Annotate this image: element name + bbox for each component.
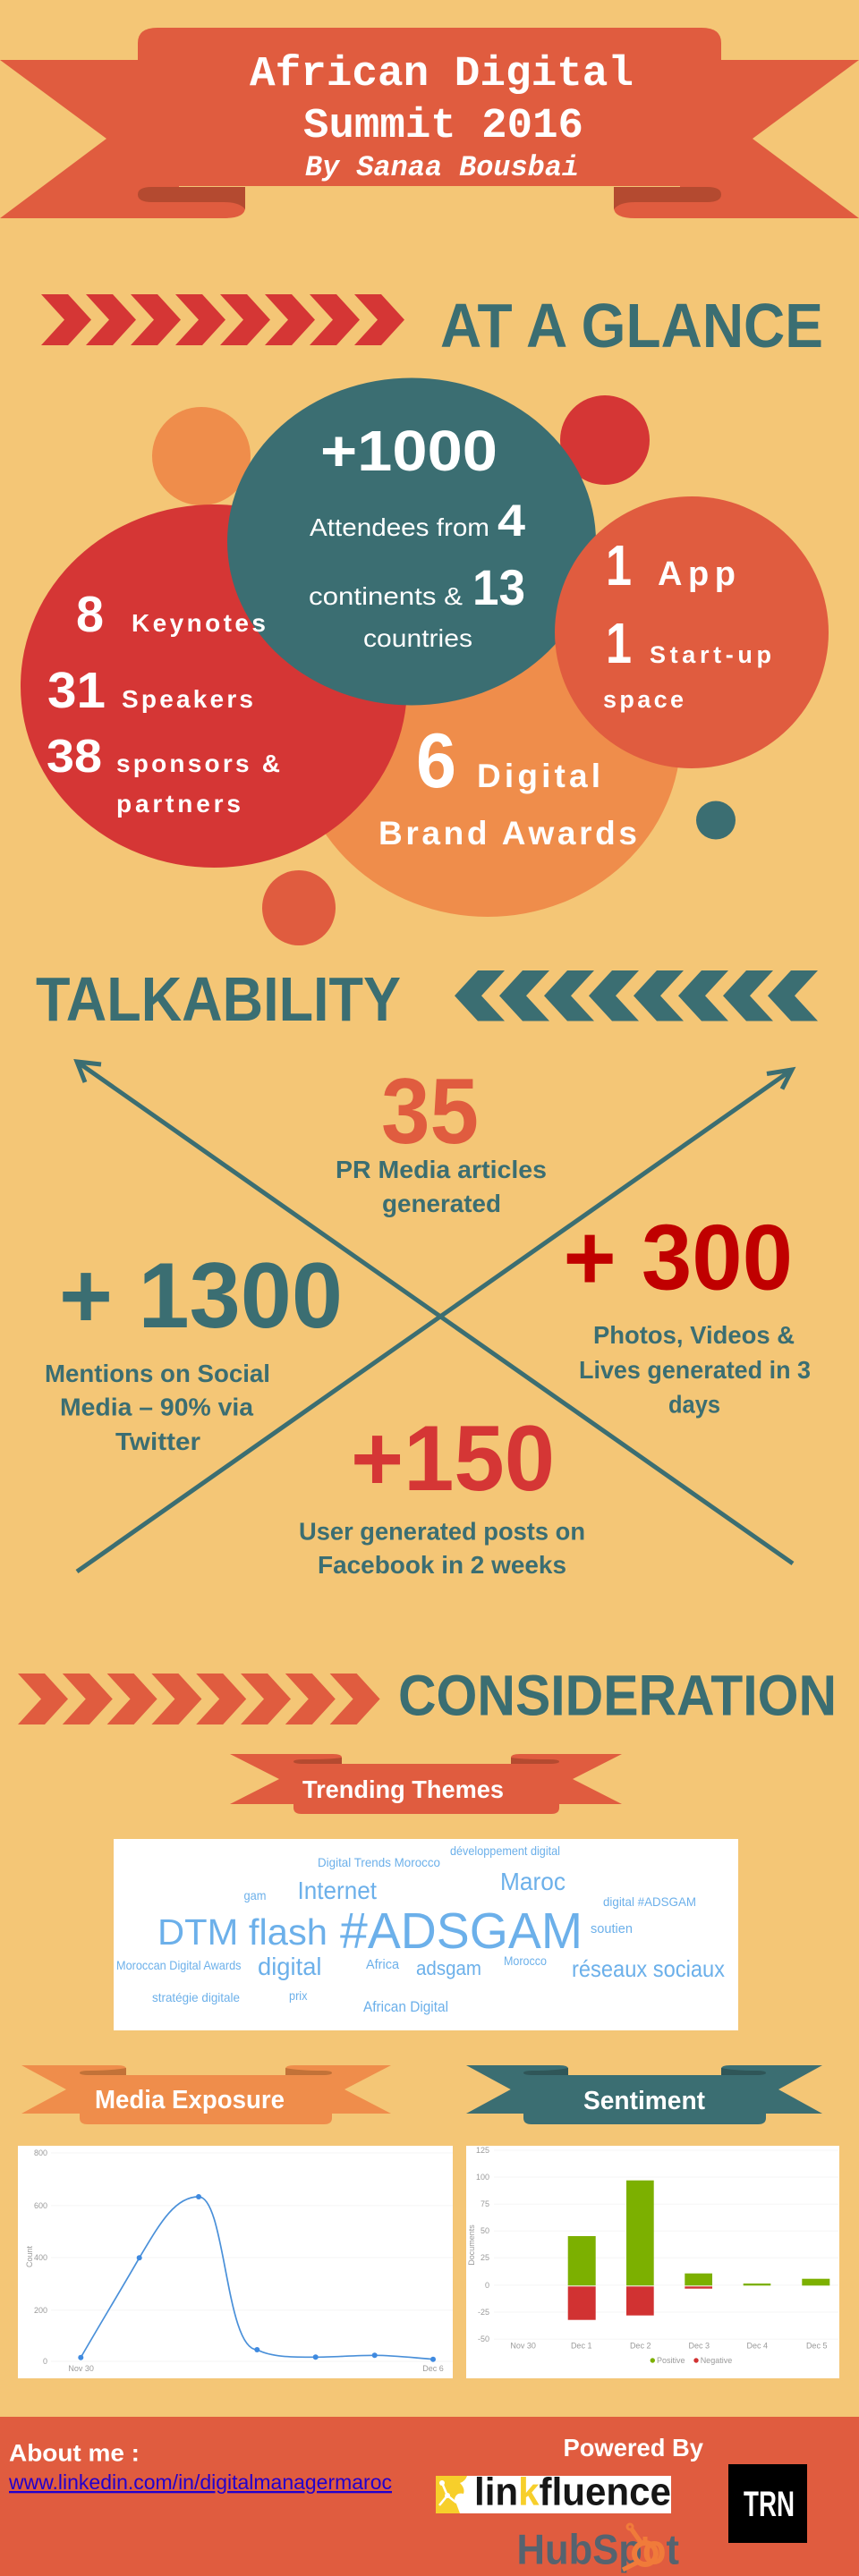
app stats: 1 [606,533,632,597]
ribbon label: trending themes: Trending Themes [302,1775,504,1803]
awards stats: Brand Awards [378,815,637,852]
word cloud terms: adsgam [416,1957,481,1979]
y axis labels [476,2146,489,2343]
x axis labels: Dec 5 [806,2341,827,2350]
y axis labels: 50 [481,2226,489,2235]
speakers stats [47,586,280,818]
word cloud terms: African Digital [363,1998,448,2015]
word cloud terms: Africa [366,1957,400,1972]
word cloud terms: digital [258,1953,322,1980]
y axis labels: 100 [476,2173,489,2182]
awards stats [378,718,637,852]
title text [250,51,634,184]
y axis title: Documents [467,2224,476,2266]
ribbon label: sentiment: Sentiment [583,2087,705,2115]
y axis labels: 400 [34,2253,47,2262]
speakers stats: 8 [76,586,104,643]
attendees stats: +1000 [320,419,498,483]
bubble: red large [21,504,407,868]
chevrons: consideration [18,1674,380,1724]
sprocket: hubspot [623,2524,656,2570]
arrow: up left [77,1062,793,1563]
y axis labels: 75 [481,2199,489,2208]
bubble cluster [21,377,829,945]
y axis labels: 0 [43,2357,47,2366]
stat: photos and videos: days [668,1391,720,1419]
ribbon: sentiment [466,2065,822,2124]
stat: PR articles [336,1060,547,1217]
about me [8,2440,392,2494]
stat: PR articles: 35 [381,1060,479,1164]
word cloud terms: soutien [591,1921,633,1936]
awards stats: Digital [477,758,600,794]
logo: linkfluence [436,2470,671,2514]
positive bars [568,2181,829,2285]
legend: Negative [701,2356,732,2365]
stat: social mentions: Twitter [115,1428,200,1455]
data points [78,2194,436,2362]
powered by: Powered By [564,2434,703,2462]
app stats: App [658,555,736,593]
word cloud terms: DTM flash [157,1911,327,1953]
x axis labels [68,2364,444,2373]
wordmark: linkfluence: linkfluence [474,2470,671,2514]
word cloud terms: Morocco [504,1953,547,1968]
word cloud terms: développement digital [450,1843,560,1858]
ribbon: trending themes [230,1754,622,1814]
logo: hubspot [517,2524,679,2573]
attendees stats: countries [363,624,472,652]
attendees stats: 4 [498,496,525,546]
wordmark: hubspot: HubSpot [517,2526,679,2573]
x axis labels: Dec 3 [689,2341,710,2350]
speakers stats: 31 [47,662,106,719]
ribbon label: media exposure: Media Exposure [95,2086,285,2114]
section header: consideration [18,1664,837,1728]
word cloud terms: digital #ADSGAM [603,1894,696,1909]
x axis labels [510,2341,827,2350]
speakers stats: 38 [47,731,102,783]
word cloud [114,1839,738,2030]
negative bars [568,2286,712,2320]
stat: social mentions [45,1244,343,1455]
attendees stats: continents & [309,582,463,610]
word cloud terms: Maroc [500,1868,566,1895]
title text: Summit 2016 [303,103,583,150]
y axis labels: 600 [34,2201,47,2210]
attendees stats: 13 [472,559,525,615]
speakers stats: sponsors & [116,750,280,777]
attendees stats: Attendees from [310,513,489,541]
chevrons: at a glance [41,294,404,345]
word cloud terms: #ADSGAM [340,1902,583,1960]
x axis labels: Dec 4 [747,2341,768,2350]
awards stats: 6 [416,718,456,804]
stat: photos and videos [564,1206,811,1419]
line chart: media exposure [18,2146,453,2378]
word cloud terms: réseaux sociaux [572,1955,725,1982]
bubble: small coral [262,870,336,945]
bubble: teal large [227,377,596,705]
y axis labels: 125 [476,2146,489,2155]
app stats [603,533,771,713]
y axis labels: 25 [481,2253,489,2262]
chevrons: talkability [455,970,818,1021]
y axis labels: 0 [485,2281,489,2290]
y axis labels: 200 [34,2306,47,2315]
speakers stats: Keynotes [132,609,266,637]
word cloud terms: stratégie digitale [152,1990,240,2004]
app stats: Start-up [650,641,771,668]
bubble: coral right [555,496,829,768]
stat: facebook posts: User generated posts on [299,1518,585,1546]
arrow: up right [77,1070,792,1572]
logo: TRN [728,2464,807,2543]
word cloud terms: gam [243,1888,267,1902]
y axis labels: -50 [478,2334,489,2343]
logo: TRN: TRN [744,2485,795,2524]
word cloud terms: Internet [297,1877,377,1904]
stat: social mentions: Media – 90% via [60,1394,253,1420]
stat: photos and videos: Photos, Videos & [593,1321,795,1349]
stat: photos and videos: + 300 [564,1206,793,1309]
bubble: small teal [696,801,736,839]
heading: talkability: TALKABILITY [36,964,401,1034]
y axis labels: -25 [478,2308,489,2317]
word cloud terms: prix [289,1988,308,2003]
stat: PR articles: PR Media articles [336,1156,547,1183]
speakers stats: Speakers [122,685,253,713]
section header: at a glance [41,291,823,360]
bar chart: sentiment [466,2146,839,2378]
about me: www.linkedin.com/in/digitalmanagermaroc [8,2470,392,2494]
x axis labels: Nov 30 [68,2364,94,2373]
y axis labels: 800 [34,2148,47,2157]
stat: PR articles: generated [382,1190,501,1217]
x axis labels: Dec 1 [571,2341,591,2350]
bubble: small orange [152,407,251,505]
logo mark: linkfluence [436,2476,467,2513]
word cloud terms: Moroccan Digital Awards [116,1958,242,1972]
ribbon: media exposure [21,2065,391,2124]
stat: social mentions: Mentions on Social [45,1360,270,1387]
legend: Positive [657,2356,685,2365]
line series [81,2197,433,2360]
title text: African Digital [250,51,634,98]
title banner [0,28,859,218]
stat: facebook posts: +150 [351,1407,555,1511]
crossed arrows [77,1062,793,1572]
y axis labels [34,2148,47,2366]
section header: talkability [36,964,818,1034]
legend [651,2356,732,2365]
attendees stats [309,419,525,652]
stat: photos and videos: Lives generated in 3 [579,1356,811,1384]
word cloud terms: Digital Trends Morocco [318,1855,440,1869]
bubble: orange large [294,554,681,917]
word cloud terms [116,1843,725,2015]
title text: By Sanaa Bousbai [305,151,579,184]
footer [0,2417,859,2576]
stat: social mentions: + 1300 [59,1244,343,1348]
stat: facebook posts: Facebook in 2 weeks [318,1551,566,1579]
bubble: small red [560,395,650,485]
x axis labels: Dec 6 [422,2364,444,2373]
app stats: 1 [606,611,632,675]
app stats: space [603,686,684,713]
x axis labels: Nov 30 [510,2341,536,2350]
heading: at a glance: AT A GLANCE [440,291,823,360]
y axis title: Count [25,2245,34,2267]
about me: About me : [9,2440,140,2467]
speakers stats: partners [116,790,241,818]
x axis labels: Dec 2 [630,2341,651,2350]
stat: facebook posts [299,1407,585,1579]
